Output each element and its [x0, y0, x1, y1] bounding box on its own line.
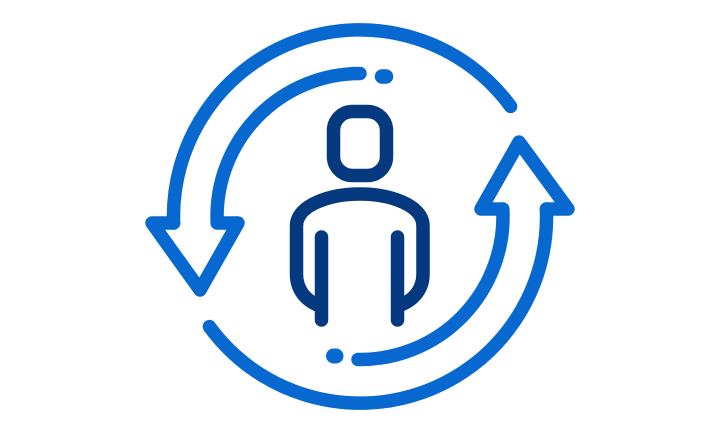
arrow head up: [481, 142, 568, 209]
arrow: counter-clockwise down-left: [152, 30, 511, 290]
inner arc right: [358, 209, 503, 360]
right arm line: [391, 237, 404, 320]
left arm line: [315, 237, 328, 320]
outer arc right: [209, 209, 547, 403]
person figure: [296, 112, 423, 320]
head: [334, 112, 386, 176]
arrow: counter-clockwise up-right: [209, 142, 568, 403]
dot top: [382, 69, 386, 84]
dot bottom: [334, 348, 336, 364]
arrow head down: [152, 223, 238, 290]
inner arc left: [217, 74, 360, 223]
torso and shoulders: [296, 194, 423, 306]
outer arc left: [173, 30, 511, 223]
